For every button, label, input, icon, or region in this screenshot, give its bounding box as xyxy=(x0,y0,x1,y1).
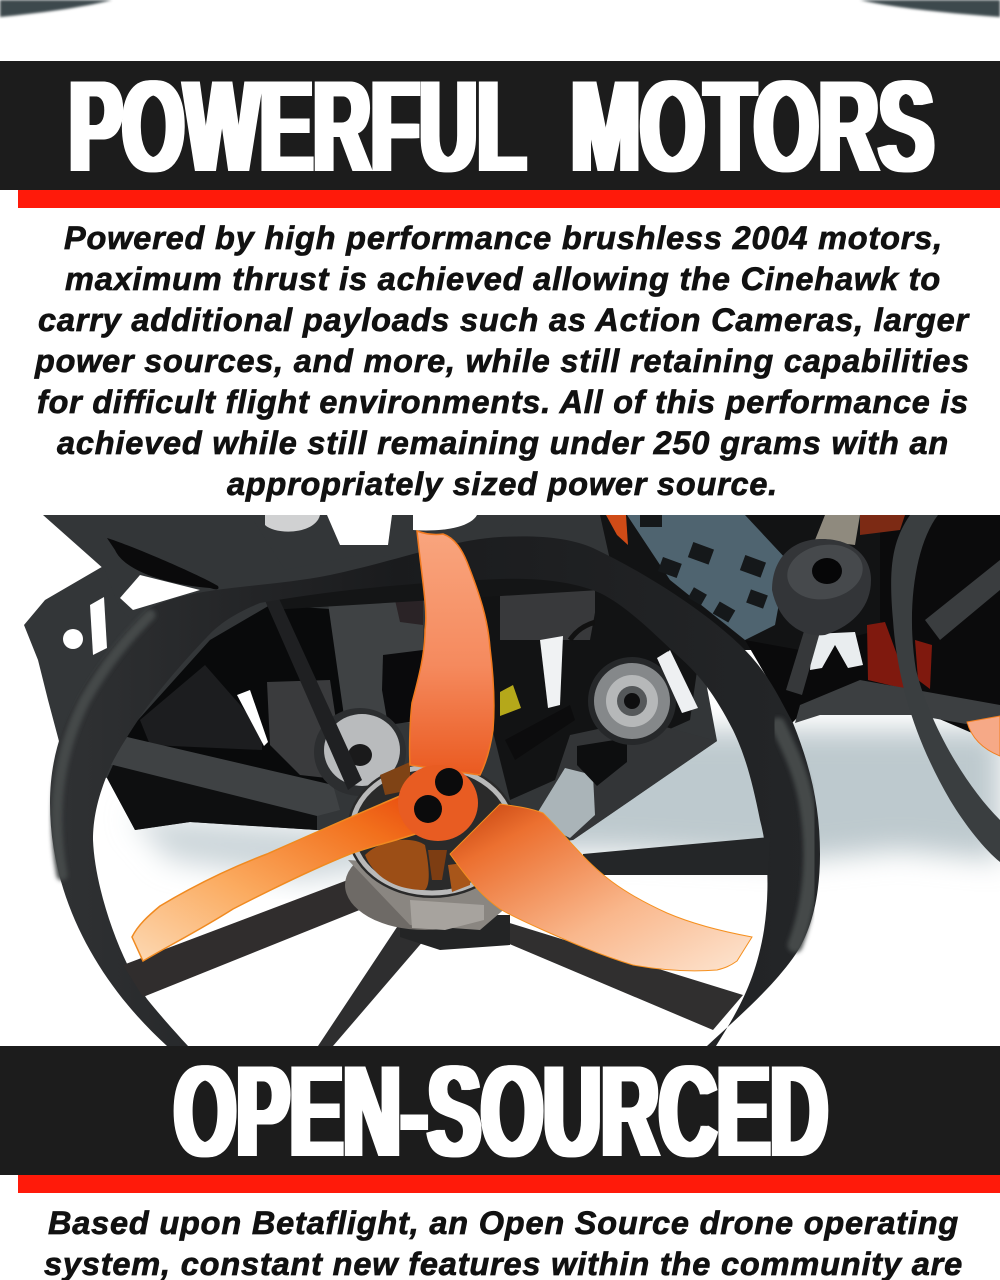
second propeller tip xyxy=(967,716,1000,756)
text block: motors description: maximum thrust is achieved allowing the Cinehawk to xyxy=(65,261,941,297)
right frame and second guard background xyxy=(745,515,1000,745)
text block: motors description: for difficult flight environments. All of this performance is xyxy=(37,384,969,420)
second prop guard ring, right xyxy=(891,515,1000,862)
ring highlight xyxy=(57,615,150,875)
blade: left xyxy=(132,796,427,961)
text block: open-source description xyxy=(44,1205,963,1280)
section: powerful motors heading: POWERFUL xyxy=(69,53,526,199)
screw 2 xyxy=(414,795,442,823)
propeller xyxy=(132,531,752,971)
ring right highlight xyxy=(778,725,811,945)
text block: open-source description: Based upon Betaflight, an Open Source drone operating xyxy=(48,1205,959,1241)
hub xyxy=(398,765,478,841)
lower guard spokes xyxy=(123,837,770,1046)
screw 1 xyxy=(435,768,463,796)
camera mount xyxy=(772,539,871,695)
carbon plate and inner frame xyxy=(24,515,717,850)
top edge fragments of previous photo xyxy=(0,0,1000,17)
text block: motors description: carry additional payloads such as Action Cameras, larger xyxy=(38,302,970,338)
upper guard arms xyxy=(43,515,610,790)
photo: drone motor and propeller close-up xyxy=(0,515,1000,1046)
text block: motors description: appropriately sized power source. xyxy=(227,466,778,502)
blade: right xyxy=(450,804,752,971)
blade: up xyxy=(410,531,494,775)
second motor mount, rear xyxy=(500,620,698,760)
main prop guard ring xyxy=(50,536,820,1046)
text block: motors description: power sources, and more, while still retaining capabilities xyxy=(34,343,970,379)
motor xyxy=(345,762,517,930)
text block: motors description: Powered by high performance brushless 2004 motors, xyxy=(64,220,943,256)
silver motor mount, left xyxy=(314,708,406,796)
floor shadows xyxy=(0,515,1000,1046)
text block: motors description: achieved while still remaining under 250 grams with an xyxy=(57,425,949,461)
flight controller board xyxy=(595,515,885,650)
text block: motors description xyxy=(34,220,970,502)
